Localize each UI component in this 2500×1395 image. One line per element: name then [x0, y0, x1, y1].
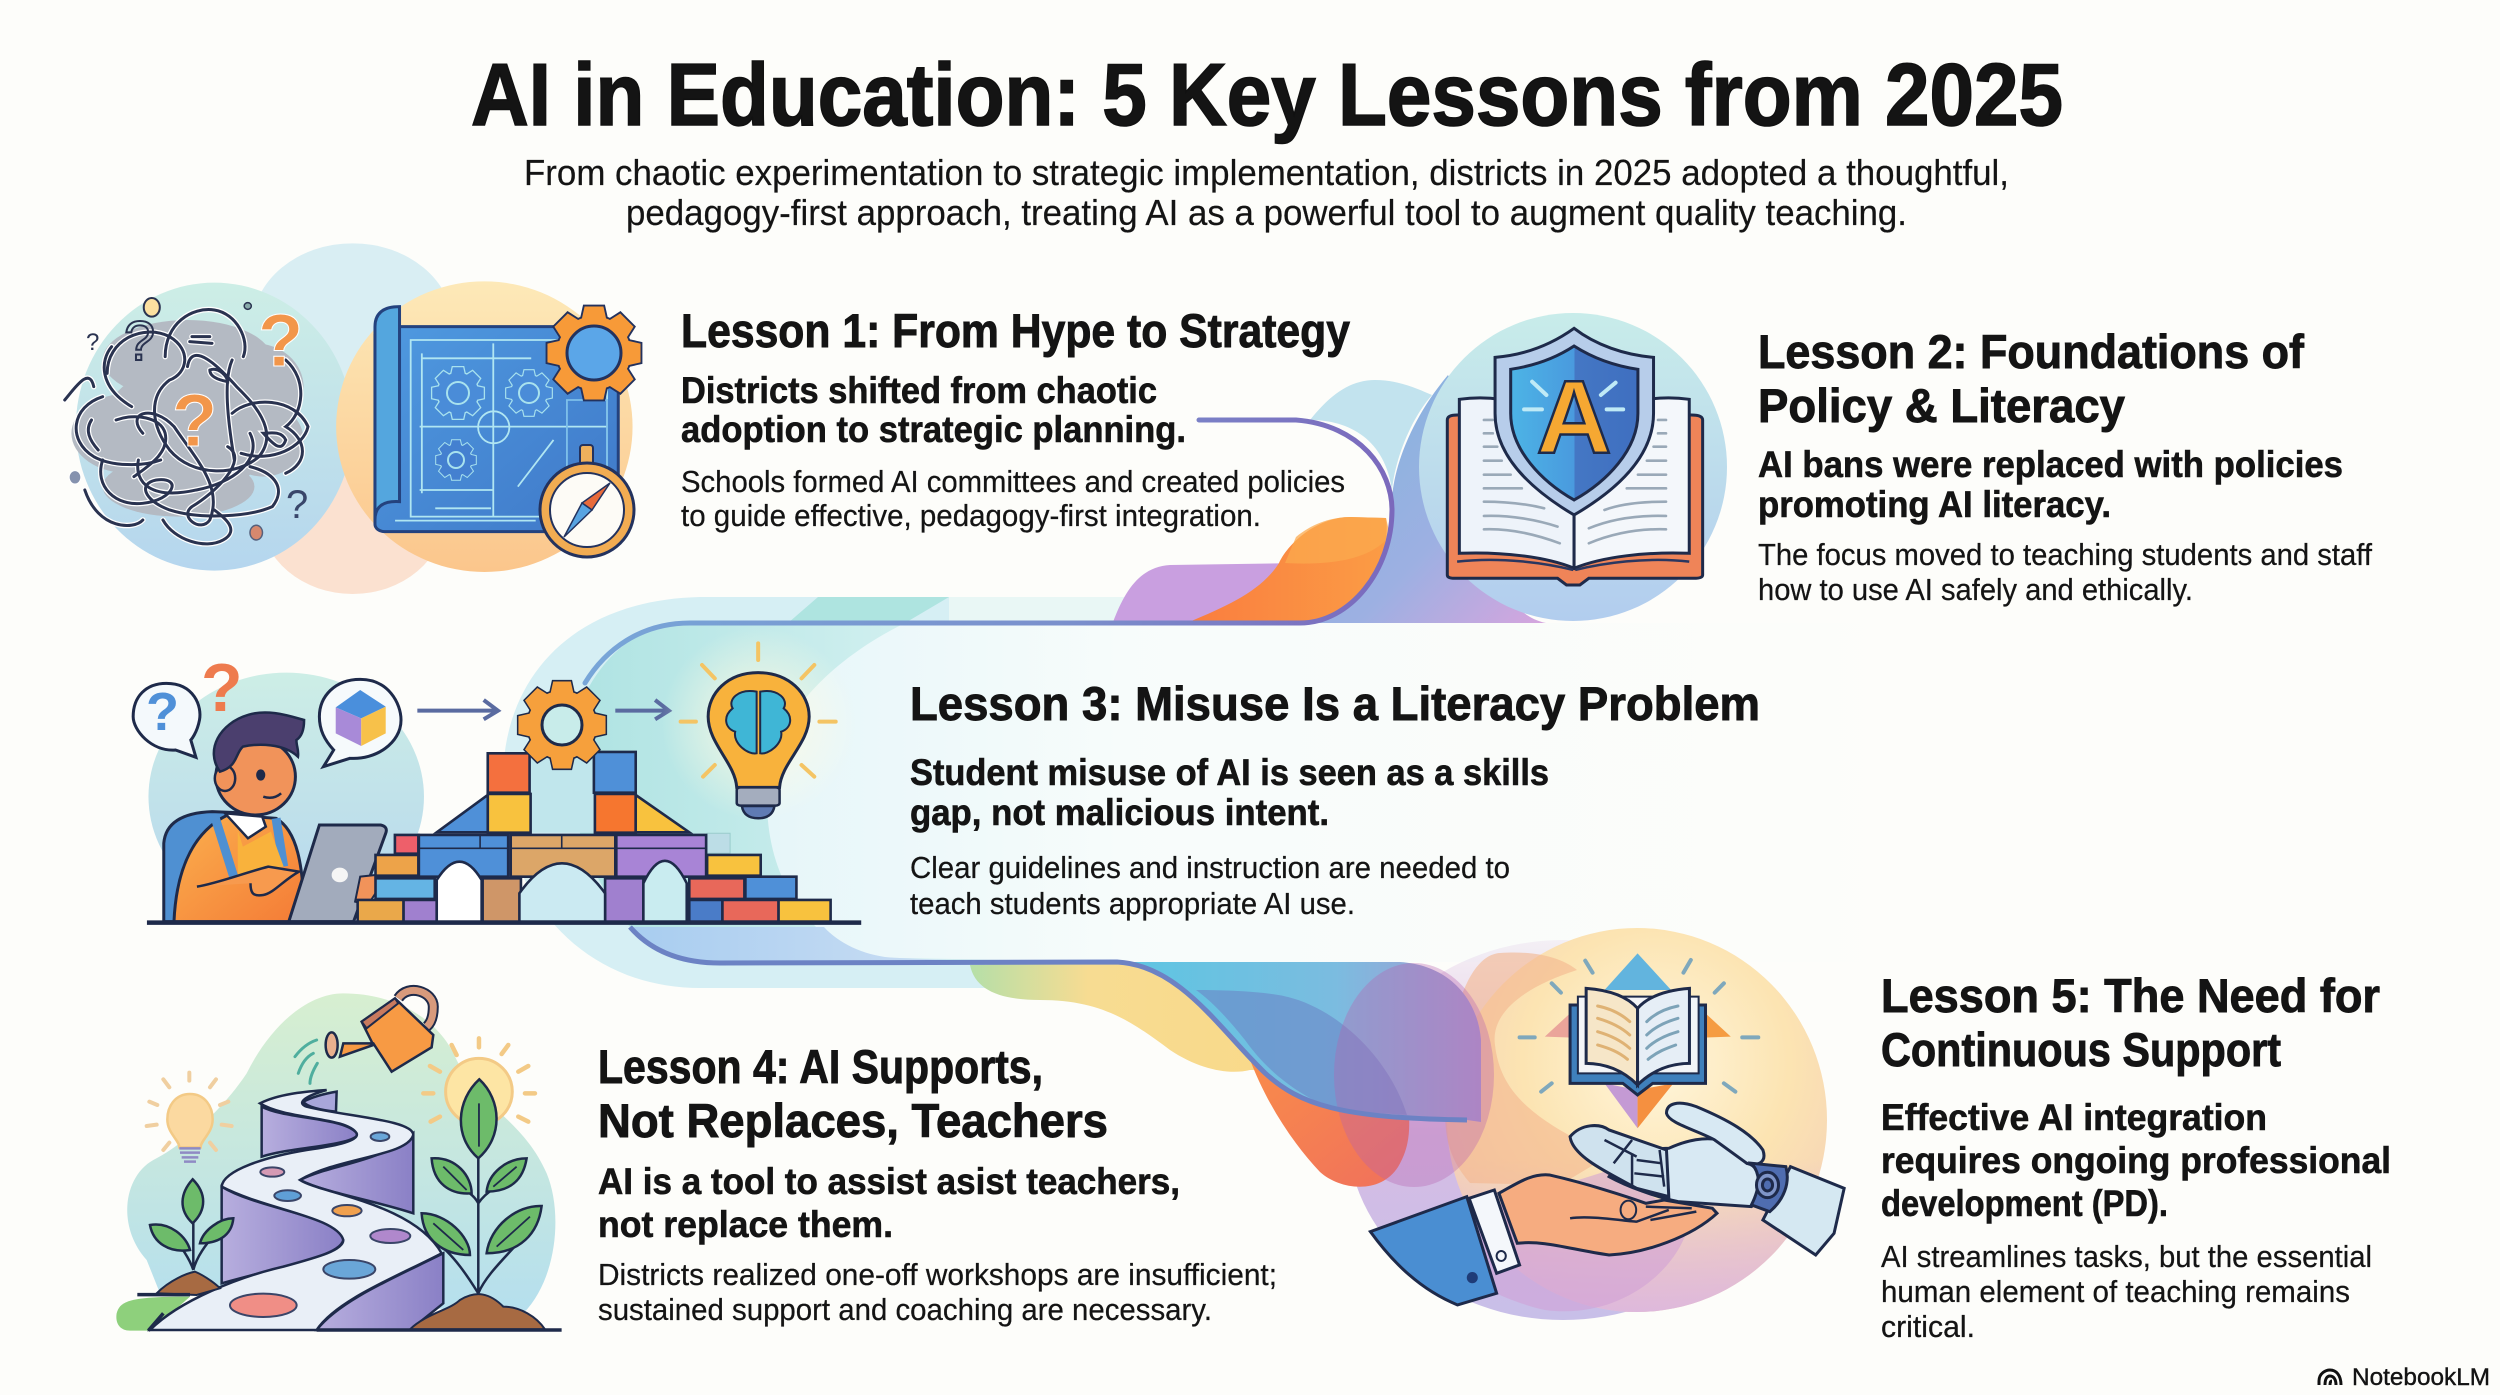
panel: lesson 2 — [1419, 313, 2372, 621]
body text: critical. — [1881, 1309, 1975, 1344]
tablet — [289, 825, 386, 922]
illustration: book and shield — [1419, 313, 1727, 621]
stepping stones — [230, 1132, 410, 1317]
key point: requires ongoing professional — [1881, 1140, 2391, 1181]
illustration: tangled chaos to blueprint — [65, 243, 641, 594]
panel: lesson 3 — [133, 627, 1760, 923]
bulb — [661, 627, 855, 820]
key point — [681, 370, 1186, 450]
key point: Effective AI integration — [1881, 1097, 2267, 1138]
body text — [910, 850, 1510, 921]
key point: development (PD). — [1881, 1183, 2168, 1224]
question marks: ? — [286, 483, 308, 527]
question marks: ? — [86, 329, 99, 356]
soil mounds — [157, 1272, 220, 1295]
body text — [1758, 537, 2372, 607]
heading: Lesson 3: Misuse Is a Literacy Problem — [910, 677, 1760, 730]
body text: Schools formed AI committees and created policies — [681, 464, 1345, 499]
open book — [1570, 1005, 1706, 1095]
gear — [518, 681, 606, 769]
block bridge — [358, 752, 831, 922]
body text: human element of teaching remains — [1881, 1274, 2350, 1309]
key point — [598, 1161, 1180, 1245]
body text: AI streamlines tasks, but the essential — [1881, 1239, 2372, 1274]
body text — [1881, 1239, 2372, 1344]
body text: sustained support and coaching are necessary. — [598, 1292, 1212, 1327]
key point: Student misuse of AI is seen as a skills — [910, 752, 1549, 793]
question marks: ? — [258, 299, 303, 382]
body text: The focus moved to teaching students and staff — [1758, 537, 2372, 572]
road — [150, 1090, 442, 1330]
heading: Continuous Support — [1881, 1023, 2281, 1076]
question marks: ? — [172, 379, 217, 462]
question marks — [146, 650, 243, 742]
gray confusion cloud — [71, 320, 304, 517]
key point — [1758, 444, 2343, 525]
heading — [1881, 969, 2380, 1076]
heading — [1758, 325, 2304, 432]
panel: lesson 1 — [65, 243, 1350, 594]
title: AI in Education: 5 Key Lessons from 2025 — [471, 45, 2063, 144]
panel: lesson 5 — [1370, 953, 2391, 1344]
illustration: student, building blocks and lightbulb — [133, 627, 861, 923]
speech bubbles — [133, 683, 200, 757]
body text: Districts realized one-off workshops are insufficient; — [598, 1257, 1277, 1292]
heading: Lesson 2: Foundations of — [1758, 325, 2304, 378]
heading: Lesson 1: From Hype to Strategy — [681, 304, 1350, 357]
body text — [598, 1257, 1277, 1327]
key point — [1881, 1097, 2391, 1224]
panel: lesson 4 — [116, 990, 1277, 1331]
student body — [174, 815, 304, 922]
subtitle — [524, 152, 2009, 233]
arrows — [417, 700, 498, 719]
question marks — [86, 299, 308, 527]
key point — [910, 752, 1549, 833]
question marks: ? — [201, 650, 243, 726]
subtitle: From chaotic experimentation to strategic implementation, districts in 2025 adopted a thoughtful, — [524, 152, 2009, 193]
key point: gap, not malicious intent. — [910, 792, 1329, 833]
blueprint gears — [432, 367, 552, 480]
key point: not replace them. — [598, 1204, 893, 1245]
question marks: ? — [146, 682, 179, 742]
diamond behind book — [1605, 953, 1671, 990]
subtitle: pedagogy-first approach, treating AI as a powerful tool to augment quality teaching. — [626, 192, 1907, 233]
body text: to guide effective, pedagogy-first integration. — [681, 498, 1261, 533]
watering can — [398, 990, 433, 1027]
heading: Not Replaces, Teachers — [598, 1094, 1108, 1147]
sun — [446, 1058, 512, 1125]
blueprint — [375, 327, 618, 532]
plants — [150, 1079, 542, 1293]
flowing ribbon connecting the lessons — [503, 375, 1900, 1320]
NotebookLM logo: NotebookLM — [2352, 1364, 2490, 1391]
body text — [681, 464, 1345, 533]
key point: AI bans were replaced with policies — [1758, 444, 2343, 485]
illustration: human and robot hands with book — [1370, 953, 1844, 1305]
key point: promoting AI literacy. — [1758, 484, 2111, 525]
orange gear — [547, 306, 641, 400]
robot hand — [1570, 1103, 1844, 1255]
heading: Policy & Literacy — [1758, 379, 2125, 432]
compass — [540, 445, 634, 557]
heading — [598, 1040, 1108, 1147]
illustration: book and shield: A — [1536, 360, 1612, 476]
human hand and sleeve — [1370, 1175, 1717, 1305]
key point: adoption to strategic planning. — [681, 409, 1186, 450]
backpack — [164, 812, 253, 922]
body text: how to use AI safely and ethically. — [1758, 572, 2193, 607]
left bulb — [167, 1094, 213, 1147]
road walls — [150, 1090, 443, 1330]
heading: Lesson 4: AI Supports, — [598, 1040, 1043, 1093]
body text: teach students appropriate AI use. — [910, 886, 1355, 921]
heading: Lesson 5: The Need for — [1881, 969, 2380, 1022]
key point: AI is a tool to assist asist teachers, — [598, 1161, 1180, 1202]
ground — [116, 1297, 190, 1331]
key point: Districts shifted from chaotic — [681, 370, 1157, 411]
question marks: ? — [124, 309, 155, 372]
illustration: winding path, plants and watering can — [116, 990, 562, 1331]
body text: Clear guidelines and instruction are needed to — [910, 850, 1510, 885]
